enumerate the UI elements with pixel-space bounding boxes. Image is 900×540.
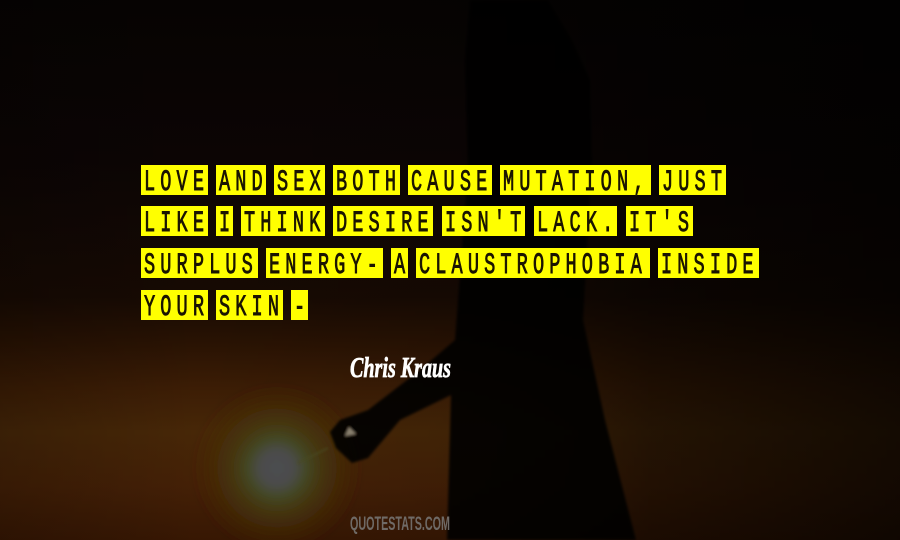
line 4: [141, 290, 310, 325]
line 3: INSIDE: [661, 249, 759, 283]
line 1: BOTH: [336, 166, 401, 200]
watermark: QUOTESTATS.COM: [350, 514, 450, 535]
author name: Chris Kraus: [350, 353, 451, 384]
line 1: [141, 165, 727, 200]
line 1: MUTATION,: [503, 166, 650, 200]
line 2: [141, 206, 694, 241]
light between the fingers: [345, 427, 356, 436]
line 3: CLAUSTROPHOBIA: [419, 249, 647, 283]
line 4: SKIN: [219, 291, 284, 325]
line 2: DESIRE: [336, 207, 434, 241]
line 3: ENERGY-: [269, 249, 383, 283]
line 4: YOUR: [144, 291, 209, 325]
line 3: SURPLUS: [144, 249, 258, 283]
line 1: SEX: [277, 166, 326, 200]
line 2: LACK.: [537, 207, 618, 241]
line 1: CAUSE: [411, 166, 492, 200]
line 1: AND: [219, 166, 268, 200]
sparkler stick: [298, 448, 328, 463]
line 2: IT'S: [629, 207, 694, 241]
line 3: A: [394, 249, 410, 283]
sun glow: [192, 383, 362, 540]
line 2: LIKE: [144, 207, 209, 241]
line 2: ISN'T: [445, 207, 526, 241]
line 2: I: [219, 207, 235, 241]
line 1: LOVE: [144, 166, 209, 200]
line 2: THINK: [244, 207, 325, 241]
line 1: JUST: [662, 166, 727, 200]
line 3: [141, 248, 759, 283]
silhouette of a woman holding a sparkler: [298, 0, 636, 540]
line 4: -: [294, 291, 310, 325]
quote text: [141, 165, 759, 325]
